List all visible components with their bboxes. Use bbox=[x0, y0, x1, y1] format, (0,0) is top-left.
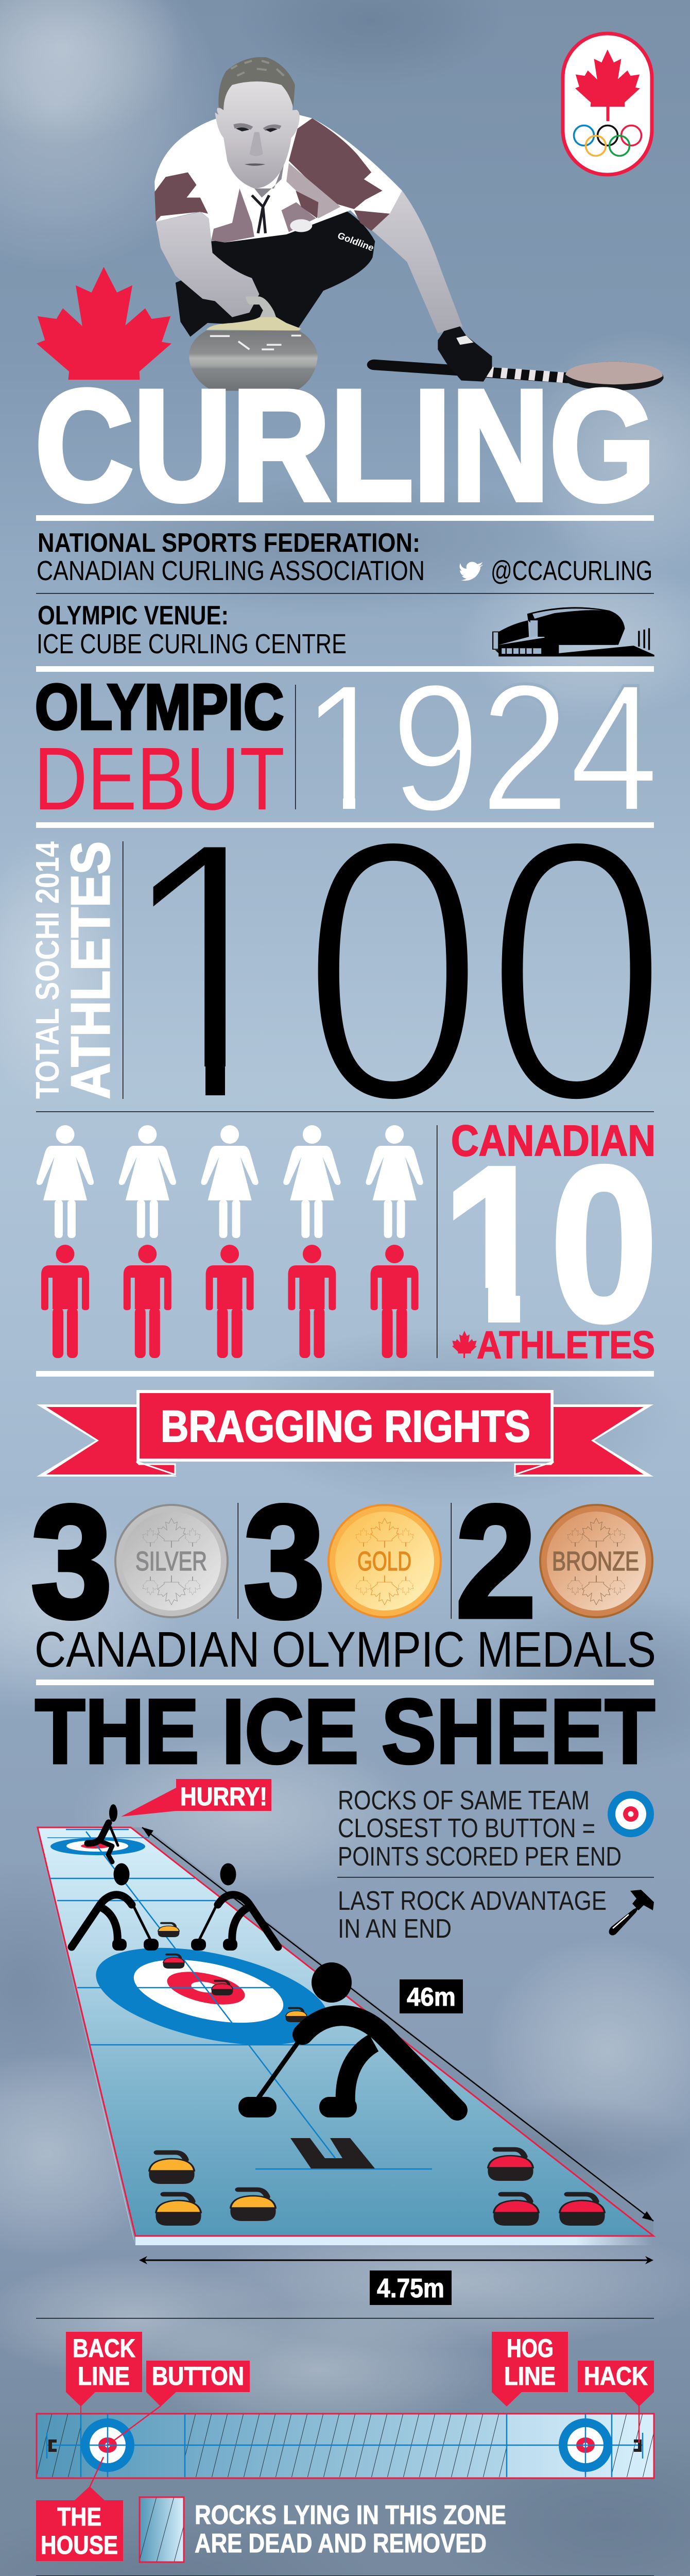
callout: hurry bbox=[121, 1779, 271, 1817]
note: last rock advantage bbox=[338, 1886, 607, 1944]
icon: small leaf bbox=[452, 1331, 477, 1358]
medal: silver bbox=[114, 1504, 229, 1618]
pictogram row: five women bbox=[37, 1125, 423, 1238]
ice surface bbox=[37, 1827, 653, 2245]
federation name: CANADIAN CURLING ASSOCIATION bbox=[37, 555, 425, 586]
label: canadian: CANADIAN bbox=[451, 1116, 656, 1165]
gold count: 3 bbox=[244, 1472, 325, 1651]
sheet plan bbox=[37, 2414, 654, 2478]
number: 10: 10 bbox=[442, 1121, 658, 1368]
note: scoring rule bbox=[338, 1786, 622, 1872]
venue label: OLYMPIC VENUE: bbox=[38, 601, 229, 631]
figure: thrower bbox=[238, 1962, 457, 2117]
callout: hurry: HURRY! bbox=[180, 1782, 267, 1811]
medal: gold: GOLD bbox=[357, 1547, 411, 1577]
section: total athletes bbox=[29, 761, 668, 1179]
label: back line bbox=[66, 2332, 142, 2414]
medal: bronze: BRONZE bbox=[552, 1547, 639, 1577]
divider bbox=[36, 666, 654, 672]
icon: Canadian Olympic Committee logo bbox=[563, 33, 652, 175]
silver count: 3 bbox=[31, 1472, 112, 1651]
medal: silver: SILVER bbox=[135, 1547, 207, 1577]
label: back line: LINE bbox=[78, 2362, 130, 2391]
icon: hammer bbox=[609, 1890, 654, 1935]
bronze count: 2 bbox=[456, 1472, 536, 1651]
figure: right sweeper bbox=[191, 1863, 278, 1951]
near house target bbox=[88, 1930, 337, 2063]
divider bbox=[36, 822, 654, 828]
rocks in play bbox=[158, 1923, 307, 2022]
icon: red maple leaf bbox=[37, 267, 171, 380]
label: the house: THE bbox=[57, 2502, 101, 2531]
section: olympic debut bbox=[34, 646, 659, 849]
label: hog line: HOG bbox=[507, 2334, 554, 2363]
heading: debut: DEBUT bbox=[34, 728, 285, 828]
icon: twitter bird bbox=[460, 562, 483, 581]
note: scoring rule: POINTS SCORED PER END bbox=[338, 1842, 622, 1872]
label: hog line bbox=[492, 2332, 568, 2406]
dimension arrow: sheet width bbox=[139, 2256, 653, 2264]
label: hack bbox=[578, 2361, 654, 2443]
far house target bbox=[50, 1838, 145, 1855]
medal: gold bbox=[327, 1504, 442, 1618]
divider bbox=[36, 515, 654, 521]
label: athletes: ATHLETES bbox=[60, 841, 121, 1099]
label: athletes: ATHLETES bbox=[477, 1323, 655, 1366]
hack bbox=[290, 2138, 375, 2168]
label: total sochi 2014: TOTAL SOCHI 2014 bbox=[29, 841, 66, 1099]
dimension: 4.75m: 4.75m bbox=[377, 2274, 444, 2303]
section: federation and venue bbox=[36, 528, 654, 659]
label: hog line: LINE bbox=[504, 2362, 556, 2391]
legend text: ARE DEAD AND REMOVED bbox=[195, 2529, 487, 2558]
note: last rock advantage: IN AN END bbox=[338, 1914, 452, 1944]
broom bbox=[374, 362, 664, 391]
athlete figure: Goldline bbox=[336, 230, 375, 253]
pictogram row: five men bbox=[41, 1245, 419, 1358]
figure: left sweeper bbox=[72, 1863, 159, 1951]
divider bbox=[36, 1680, 654, 1685]
medal: bronze bbox=[539, 1504, 653, 1618]
legend text: ROCKS LYING IN THIS ZONE bbox=[195, 2500, 506, 2530]
dimension: 46m: 46m bbox=[407, 1982, 456, 2011]
label: the house: HOUSE bbox=[41, 2531, 118, 2560]
note: scoring rule: CLOSEST TO BUTTON = bbox=[338, 1814, 595, 1843]
label: button: BUTTON bbox=[152, 2362, 244, 2391]
athlete figure bbox=[154, 57, 492, 391]
heading: olympic: OLYMPIC bbox=[35, 672, 284, 743]
dimension: 46m bbox=[400, 1979, 463, 2013]
section: medals bbox=[31, 1472, 656, 1677]
label: the house bbox=[36, 2457, 123, 2561]
section: header with athlete bbox=[35, 33, 664, 533]
federation label: NATIONAL SPORTS FEDERATION: bbox=[38, 528, 420, 558]
icon: target bbox=[608, 1791, 654, 1837]
waiting rocks: yellow team bbox=[149, 2153, 276, 2226]
legend text bbox=[195, 2500, 506, 2558]
figure: skip bbox=[88, 1804, 118, 1862]
section: sheet plan bbox=[36, 2332, 654, 2562]
banner text: BRAGGING RIGHTS bbox=[161, 1402, 530, 1451]
photo: curler delivering rock bbox=[154, 57, 664, 391]
venue name: ICE CUBE CURLING CENTRE bbox=[37, 629, 347, 659]
icon: arena bbox=[493, 607, 654, 656]
note: last rock advantage: LAST ROCK ADVANTAGE bbox=[338, 1886, 607, 1916]
label: hack: HACK bbox=[584, 2362, 648, 2391]
section: ice sheet diagram bbox=[37, 1779, 654, 2305]
label: back line: BACK bbox=[73, 2334, 135, 2363]
legend swatch: dead zone bbox=[140, 2497, 184, 2562]
label: button bbox=[108, 2361, 250, 2445]
divider bbox=[36, 1371, 654, 1377]
section: canadian athletes bbox=[37, 1116, 658, 1368]
banner: bragging rights bbox=[37, 1392, 653, 1477]
waiting rocks: red team bbox=[488, 2149, 605, 2226]
length arrow bbox=[142, 1827, 653, 2221]
note: scoring rule: ROCKS OF SAME TEAM bbox=[338, 1786, 590, 1816]
